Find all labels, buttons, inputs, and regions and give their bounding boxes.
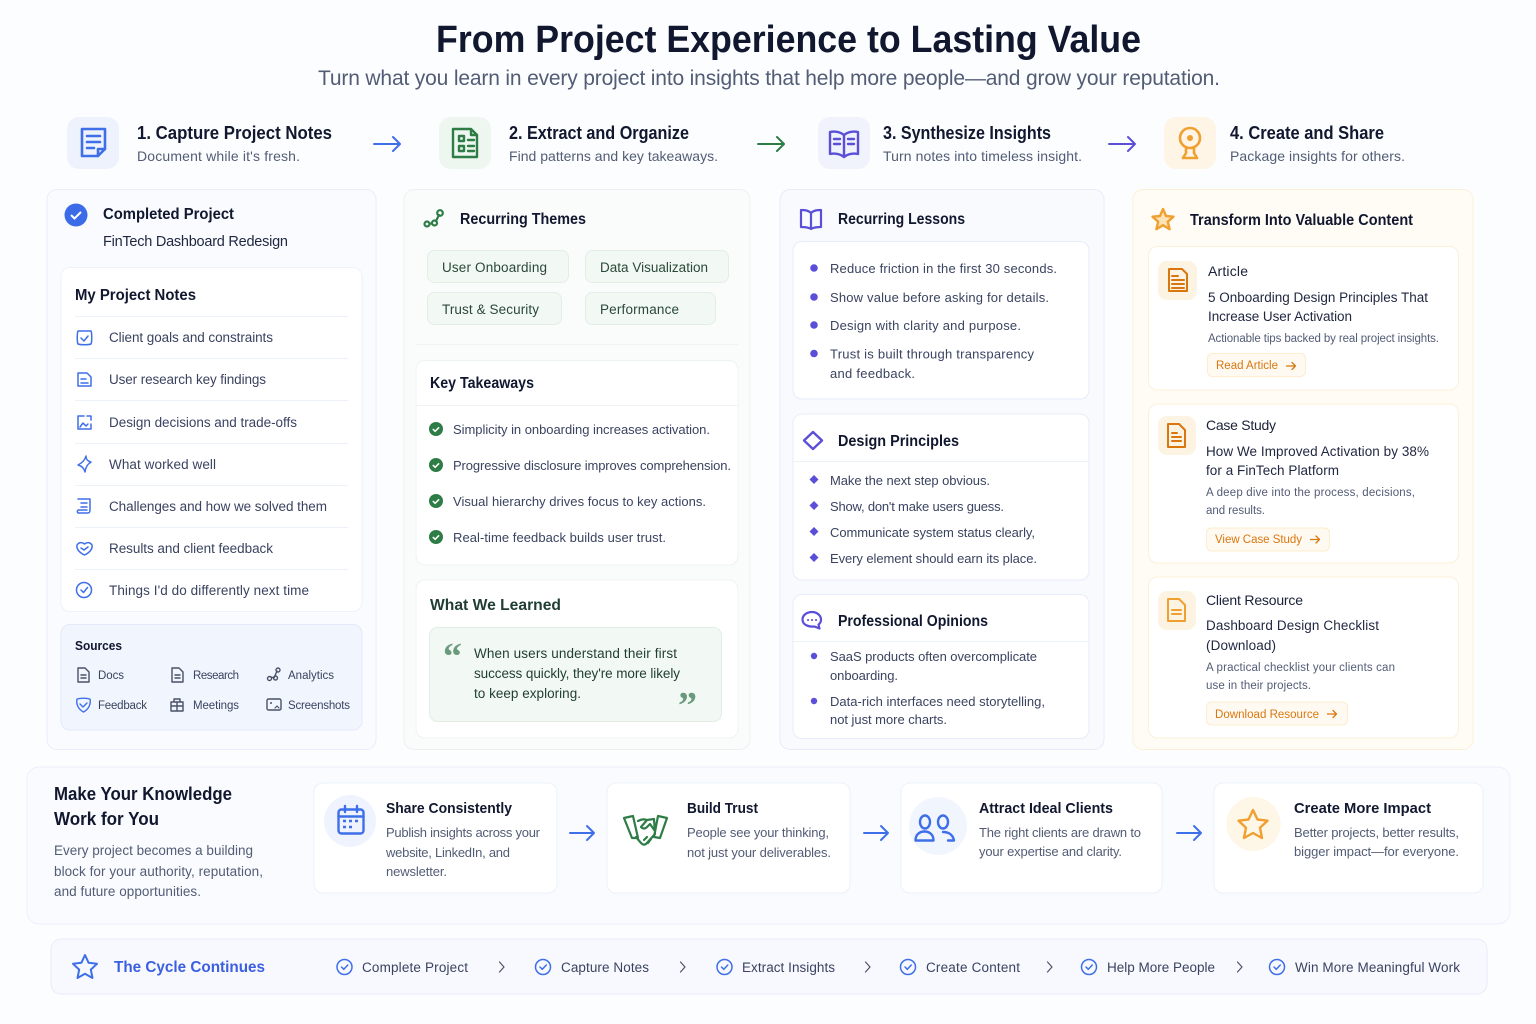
attract clients text: Attract Ideal Clients bbox=[979, 800, 1113, 817]
chip: trust and security bbox=[428, 292, 562, 324]
source: feedback bbox=[77, 698, 147, 712]
chevron bbox=[1238, 962, 1242, 972]
heading: recurring themes: Recurring Themes bbox=[460, 211, 586, 228]
principle 1: Make the next step obvious. bbox=[830, 473, 990, 488]
note: design decisions: Design decisions and trade-offs bbox=[109, 415, 297, 430]
panel: completed project bbox=[47, 190, 376, 750]
panel: make your knowledge work for you bbox=[27, 767, 1510, 924]
icon: themes nodes bbox=[424, 210, 443, 226]
source: research bbox=[172, 668, 239, 682]
button: download resource bbox=[1206, 702, 1348, 725]
card: sources bbox=[61, 624, 362, 730]
step 1: capture project notes bbox=[67, 117, 332, 169]
step 1 text: 1. Capture Project Notes bbox=[137, 123, 332, 143]
chevron bbox=[680, 962, 685, 972]
principle 2: Show, don't make users guess. bbox=[830, 499, 1004, 514]
opinion 1: onboarding. bbox=[830, 668, 898, 683]
step 2 text: 2. Extract and Organize bbox=[509, 123, 689, 143]
heading: my project notes: My Project Notes bbox=[75, 287, 196, 304]
note: things differently: Things I'd do differently next time bbox=[109, 583, 309, 598]
card: attract ideal clients bbox=[901, 783, 1162, 893]
takeaway 1: Simplicity in onboarding increases activation. bbox=[453, 422, 710, 437]
quote text bbox=[474, 646, 680, 701]
chip: data visualization: Data Visualization bbox=[600, 260, 708, 275]
icon: book bbox=[801, 210, 821, 229]
chevron bbox=[1048, 962, 1052, 972]
step 3 text: Turn notes into timeless insight. bbox=[883, 148, 1082, 164]
case study text: A deep dive into the process, decisions, bbox=[1206, 487, 1415, 499]
article text: Increase User Activation bbox=[1208, 309, 1352, 324]
step 2 text bbox=[509, 123, 718, 164]
build trust text: People see your thinking, bbox=[687, 825, 829, 840]
arrow: share to trust bbox=[570, 826, 594, 840]
client resource text: use in their projects. bbox=[1206, 680, 1311, 692]
icon: star bbox=[1153, 209, 1174, 229]
note: what worked well: What worked well bbox=[109, 457, 216, 472]
lesson 2: Show value before asking for details. bbox=[830, 290, 1049, 305]
arrow: trust to clients bbox=[864, 826, 888, 840]
principle 4: Every element should earn its place. bbox=[830, 551, 1037, 566]
source: meetings: Meetings bbox=[193, 700, 239, 712]
opinion 1 bbox=[811, 649, 1037, 683]
source: feedback: Feedback bbox=[98, 700, 147, 712]
card: client resource bbox=[1148, 577, 1458, 738]
lesson 4 bbox=[810, 346, 1034, 381]
chip: performance bbox=[586, 292, 716, 324]
closing quote mark: ” bbox=[678, 685, 697, 727]
chevron bbox=[500, 962, 504, 972]
client resource text: Dashboard Design Checklist bbox=[1206, 618, 1379, 633]
note: user research: User research key findings bbox=[109, 372, 266, 387]
opinion 2: Data-rich interfaces need storytelling, bbox=[830, 694, 1045, 709]
step 4 text: Package insights for others. bbox=[1230, 148, 1405, 164]
chip: performance: Performance bbox=[600, 302, 679, 317]
cycle: help more people: Help More People bbox=[1107, 960, 1215, 975]
source: docs bbox=[78, 668, 124, 682]
heading: recurring lessons: Recurring Lessons bbox=[838, 211, 965, 228]
card: article bbox=[1148, 246, 1458, 390]
step 4 text bbox=[1230, 123, 1405, 164]
card: my project notes bbox=[61, 268, 362, 612]
icon: handshake bbox=[624, 816, 667, 845]
arrow: step 3 to 4 bbox=[1109, 137, 1135, 151]
step 1 text bbox=[137, 123, 332, 164]
heading: the cycle continues: The Cycle Continues bbox=[114, 959, 265, 976]
case study text: How We Improved Activation by 38% bbox=[1206, 444, 1429, 459]
note: results: Results and client feedback bbox=[109, 541, 273, 556]
share consistently text: Share Consistently bbox=[386, 800, 513, 817]
build trust text bbox=[687, 800, 831, 860]
icon: diamond bbox=[804, 432, 822, 449]
cycle: complete project: Complete Project bbox=[362, 960, 468, 975]
chevron bbox=[866, 962, 870, 972]
client resource text: A practical checklist your clients can bbox=[1206, 662, 1395, 674]
step 3 text: 3. Synthesize Insights bbox=[883, 123, 1051, 143]
lesson 4: Trust is built through transparency bbox=[830, 346, 1034, 362]
step 3: synthesize insights bbox=[818, 117, 1082, 169]
opening quote mark: “ bbox=[443, 636, 462, 678]
source: research: Research bbox=[193, 670, 239, 682]
quote text: When users understand their first bbox=[474, 646, 677, 661]
opinion 1: SaaS products often overcomplicate bbox=[830, 649, 1037, 664]
icon: sheet bbox=[439, 117, 491, 169]
chip: trust and security: Trust & Security bbox=[442, 302, 539, 317]
takeaway 4: Real-time feedback builds user trust. bbox=[453, 530, 666, 545]
create impact text bbox=[1294, 800, 1459, 859]
cycle: create content: Create Content bbox=[926, 960, 1020, 975]
attract clients text: your expertise and clarity. bbox=[979, 844, 1122, 859]
cycle: capture notes: Capture Notes bbox=[561, 960, 649, 975]
build trust text: Build Trust bbox=[687, 800, 758, 817]
panel: the cycle continues bbox=[51, 939, 1487, 994]
step 1 text: Document while it's fresh. bbox=[137, 148, 300, 164]
case study text bbox=[1206, 417, 1429, 517]
button: read article: Read Article bbox=[1216, 360, 1278, 372]
project heading: Completed Project bbox=[103, 206, 235, 223]
principle 3: Communicate system status clearly, bbox=[830, 525, 1035, 540]
intro text bbox=[54, 784, 263, 899]
source: analytics: Analytics bbox=[288, 670, 334, 682]
card: share consistently bbox=[314, 783, 557, 893]
step 2: extract and organize bbox=[439, 117, 718, 169]
source: screenshots bbox=[267, 699, 350, 712]
arrow: step 2 to 3 bbox=[758, 137, 784, 151]
card: lessons list bbox=[793, 242, 1089, 399]
case study text: and results. bbox=[1206, 505, 1265, 517]
client resource text: Client Resource bbox=[1206, 592, 1303, 608]
arrow: step 1 to 2 bbox=[374, 137, 400, 151]
build trust text: not just your deliverables. bbox=[687, 845, 831, 860]
intro text: Make Your Knowledge bbox=[54, 784, 232, 804]
heading: transform: Transform Into Valuable Content bbox=[1190, 212, 1413, 229]
card: design principles bbox=[793, 414, 1089, 580]
card: build trust bbox=[607, 783, 850, 893]
button: view case study: View Case Study bbox=[1215, 534, 1302, 546]
card: professional opinions bbox=[793, 594, 1089, 738]
icon: people bbox=[909, 797, 967, 855]
opinion 2: not just more charts. bbox=[830, 712, 947, 727]
icon: cycle star bbox=[73, 955, 97, 978]
quote text: success quickly, they're more likely bbox=[474, 666, 680, 681]
button: download resource: Download Resource bbox=[1215, 709, 1319, 721]
title: From Project Experience to Lasting Value bbox=[436, 19, 1141, 61]
chip: data visualization bbox=[586, 250, 728, 282]
heading: sources: Sources bbox=[75, 638, 122, 653]
panel: transform into valuable content bbox=[1133, 190, 1473, 750]
create impact text: Better projects, better results, bbox=[1294, 825, 1459, 840]
arrow: clients to impact bbox=[1177, 826, 1201, 840]
case study text: Case Study bbox=[1206, 417, 1276, 433]
card: what we learned bbox=[416, 580, 738, 738]
source: analytics bbox=[268, 668, 334, 682]
takeaway 3: Visual hierarchy drives focus to key actions. bbox=[453, 494, 706, 509]
create impact text: bigger impact—for everyone. bbox=[1294, 844, 1459, 859]
card: create more impact bbox=[1214, 783, 1483, 893]
client resource text: (Download) bbox=[1206, 638, 1276, 653]
note: challenges: Challenges and how we solved them bbox=[109, 499, 327, 514]
source: screenshots: Screenshots bbox=[288, 700, 350, 712]
intro text: Work for You bbox=[54, 809, 159, 829]
article text: 5 Onboarding Design Principles That bbox=[1208, 290, 1428, 305]
quote box bbox=[430, 628, 722, 727]
icon: open book bbox=[818, 117, 870, 169]
step 2 text: Find patterns and key takeaways. bbox=[509, 148, 718, 164]
icon: lightbulb award bbox=[1164, 117, 1216, 169]
source: meetings bbox=[171, 699, 239, 712]
button: view case study bbox=[1206, 528, 1330, 551]
chip: user onboarding bbox=[428, 250, 568, 282]
icon: speech bubble bbox=[802, 612, 821, 628]
icon: calendar bbox=[324, 795, 376, 847]
step 3 text bbox=[883, 123, 1082, 164]
cycle: win more meaningful work: Win More Meaningful Work bbox=[1295, 960, 1460, 975]
share consistently text: newsletter. bbox=[386, 864, 447, 879]
source: docs: Docs bbox=[98, 670, 124, 682]
chip: user onboarding: User Onboarding bbox=[442, 260, 547, 275]
heading: what we learned: What We Learned bbox=[430, 597, 561, 614]
share consistently text: Publish insights across your bbox=[386, 825, 541, 840]
attract clients text: The right clients are drawn to bbox=[979, 825, 1141, 840]
lesson 4: and feedback. bbox=[830, 366, 915, 381]
article text: Actionable tips backed by real project insights. bbox=[1208, 333, 1439, 345]
project heading bbox=[103, 206, 288, 250]
panel: recurring themes bbox=[404, 190, 750, 750]
icon: notes document bbox=[67, 117, 119, 169]
article text bbox=[1208, 263, 1439, 345]
attract clients text bbox=[979, 800, 1141, 859]
panel: recurring lessons and principles bbox=[780, 190, 1104, 750]
heading: key takeaways: Key Takeaways bbox=[430, 375, 534, 392]
cycle: extract insights: Extract Insights bbox=[742, 960, 835, 975]
subtitle: Turn what you learn in every project into insights that help more people—and grow your reputation. bbox=[318, 67, 1220, 90]
opinion 2 bbox=[811, 694, 1045, 727]
share consistently text: website, LinkedIn, and bbox=[385, 845, 510, 860]
heading: design principles: Design Principles bbox=[838, 433, 959, 450]
intro text: Every project becomes a building bbox=[54, 843, 253, 858]
icon: case study document bbox=[1158, 416, 1196, 455]
card: case study bbox=[1148, 404, 1458, 563]
button: read article bbox=[1208, 354, 1306, 376]
step 4 text: 4. Create and Share bbox=[1230, 123, 1384, 143]
icon: checklist document bbox=[1158, 591, 1196, 630]
case study text: for a FinTech Platform bbox=[1206, 463, 1339, 478]
project heading: FinTech Dashboard Redesign bbox=[103, 234, 288, 250]
heading: professional opinions: Professional Opinions bbox=[838, 613, 988, 630]
article text: Article bbox=[1208, 263, 1248, 279]
lesson 1: Reduce friction in the first 30 seconds. bbox=[830, 261, 1057, 276]
lesson 3: Design with clarity and purpose. bbox=[830, 318, 1021, 333]
client resource text bbox=[1206, 592, 1395, 692]
icon: star in circle bbox=[1226, 797, 1280, 851]
icon: check badge bbox=[64, 204, 88, 226]
step 4: create and share bbox=[1164, 117, 1405, 169]
share consistently text bbox=[385, 800, 541, 879]
create impact text: Create More Impact bbox=[1294, 800, 1431, 817]
takeaway 2: Progressive disclosure improves comprehension. bbox=[453, 458, 731, 473]
quote text: to keep exploring. bbox=[474, 686, 581, 701]
note: client goals: Client goals and constraints bbox=[109, 330, 273, 345]
icon: article document bbox=[1158, 261, 1197, 300]
intro text: block for your authority, reputation, bbox=[54, 864, 263, 879]
card: key takeaways bbox=[416, 360, 738, 565]
intro text: and future opportunities. bbox=[54, 884, 201, 899]
